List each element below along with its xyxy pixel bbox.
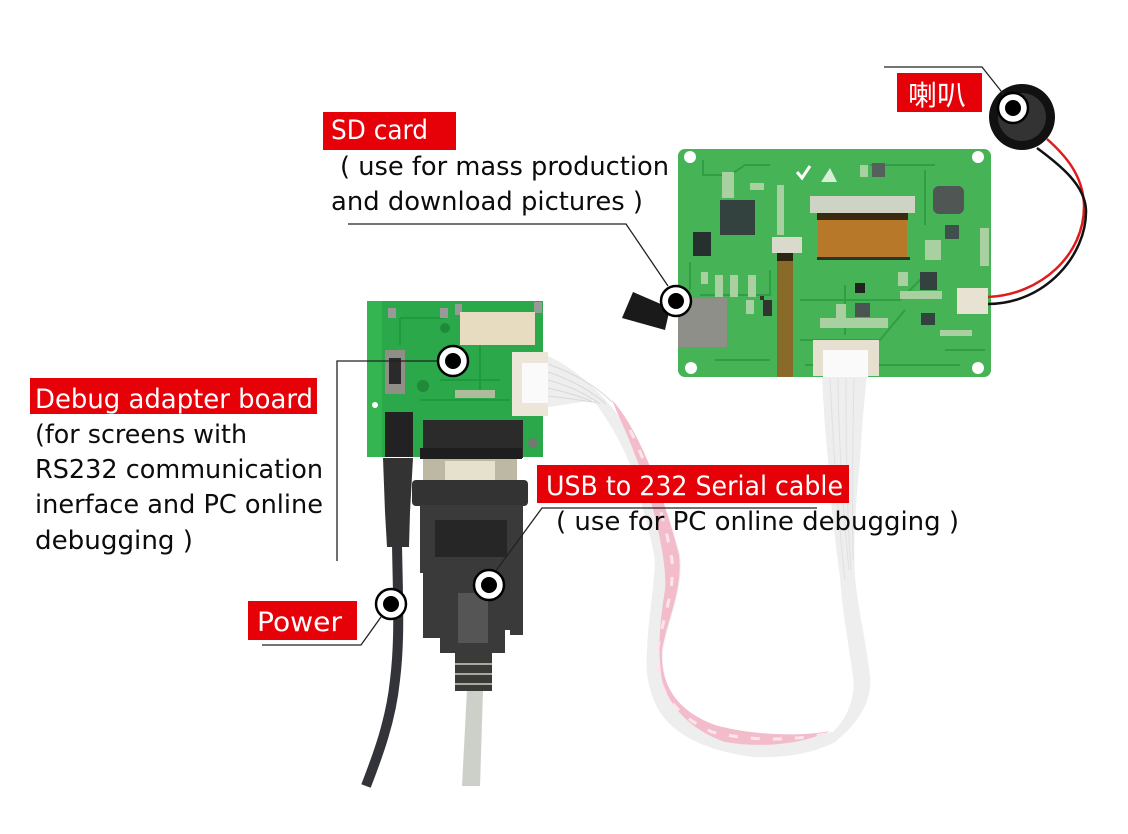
USB cable [462, 690, 483, 786]
white logos [797, 166, 810, 178]
ribbon connector on adapter [512, 352, 548, 416]
cable connector [813, 340, 879, 376]
label: SD card: SD card [331, 115, 428, 146]
main control board [678, 149, 991, 377]
mounting holes [684, 151, 984, 374]
text: debug adapter description: RS232 communication [35, 455, 323, 485]
inductor [933, 186, 964, 214]
text: debug adapter description: debugging ) [35, 526, 193, 556]
small components [701, 165, 989, 336]
text: debug adapter description: inerface and PC online [35, 490, 323, 520]
marker dots [376, 93, 1028, 619]
speaker [989, 84, 1055, 150]
power cable [366, 458, 413, 786]
main chip [720, 200, 755, 235]
ribbon cable [548, 356, 870, 757]
speaker connector [957, 288, 988, 314]
power jack [385, 412, 413, 457]
debug adapter board [367, 301, 548, 482]
leader lines [262, 67, 1005, 645]
text: debug adapter description [35, 420, 323, 556]
serial plug [412, 480, 528, 691]
text: SD card description: and download pictures ) [331, 187, 643, 217]
micro SD card [622, 292, 670, 330]
label: speaker: 喇叭 [908, 74, 966, 114]
serial port [423, 420, 523, 458]
label: SD card [323, 112, 456, 150]
text: SD card description: ( use for mass production [340, 152, 669, 182]
speaker wires [988, 139, 1086, 304]
SD card slot [678, 298, 727, 347]
FPC connector and flex cable [810, 196, 915, 213]
label: debug adapter board: Debug adapter board [35, 384, 313, 415]
text: SD card description [331, 152, 669, 217]
text: debug adapter description: (for screens with [35, 420, 247, 450]
label: speaker [897, 73, 982, 114]
label: power: Power [257, 607, 342, 638]
text: serial cable description: ( use for PC online debugging ) [556, 507, 959, 537]
label: power [248, 601, 357, 640]
label: USB to 232 serial cable: USB to 232 Serial cable [546, 471, 843, 502]
